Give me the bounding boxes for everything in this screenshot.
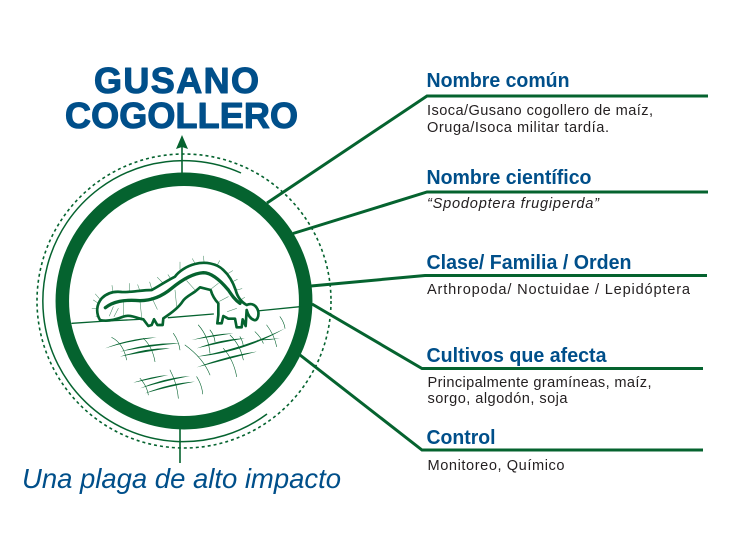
info block: nombre común: Oruga/Isoca militar tardía. xyxy=(427,120,609,136)
title: GUSANO xyxy=(94,60,259,101)
info block: clase familia orden: Clase/ Familia / Orden xyxy=(426,252,632,274)
title xyxy=(65,60,298,136)
info block: nombre científico: Nombre científico xyxy=(426,167,592,189)
caterpillar body outline xyxy=(97,263,258,327)
info block: nombre científico: “Spodoptera frugiperda” xyxy=(427,196,600,212)
dotted outer circle xyxy=(37,154,331,448)
info block: cultivos que afecta: sorgo, algodón, soja xyxy=(428,391,568,407)
title: COGOLLERO xyxy=(65,95,298,136)
bottom stem line xyxy=(179,429,181,463)
info block: nombre científico xyxy=(426,167,600,212)
thin arc around circle xyxy=(43,161,267,442)
grass blades xyxy=(105,328,285,393)
arrow: up to title xyxy=(176,135,188,174)
grass illustration xyxy=(105,317,285,398)
info block: control xyxy=(426,427,564,474)
info block: cultivos que afecta: Cultivos que afecta xyxy=(426,345,607,367)
body hairs xyxy=(92,256,245,317)
info block: nombre común: Nombre común xyxy=(426,70,570,92)
info block: cultivos que afecta: Principalmente gramíneas, maíz, xyxy=(428,375,652,391)
info block: cultivos que afecta xyxy=(426,345,652,407)
info block: control: Control xyxy=(426,427,496,449)
connector lines xyxy=(267,96,708,450)
info block: nombre común: Isoca/Gusano cogollero de maíz, xyxy=(427,103,653,119)
info block: control: Monitoreo, Químico xyxy=(428,458,564,474)
main green ring xyxy=(62,179,306,423)
info block: clase familia orden: Arthropoda/ Noctuidae / Lepidóptera xyxy=(427,282,691,298)
info block: clase familia orden xyxy=(426,252,691,298)
info block: nombre común xyxy=(426,70,653,136)
body segments xyxy=(109,281,237,317)
subtitle: Una plaga de alto impacto xyxy=(22,463,341,494)
ground line xyxy=(72,307,300,323)
dorsal stripe xyxy=(105,273,240,308)
caterpillar illustration xyxy=(72,256,300,327)
grass cross stems xyxy=(112,317,285,398)
